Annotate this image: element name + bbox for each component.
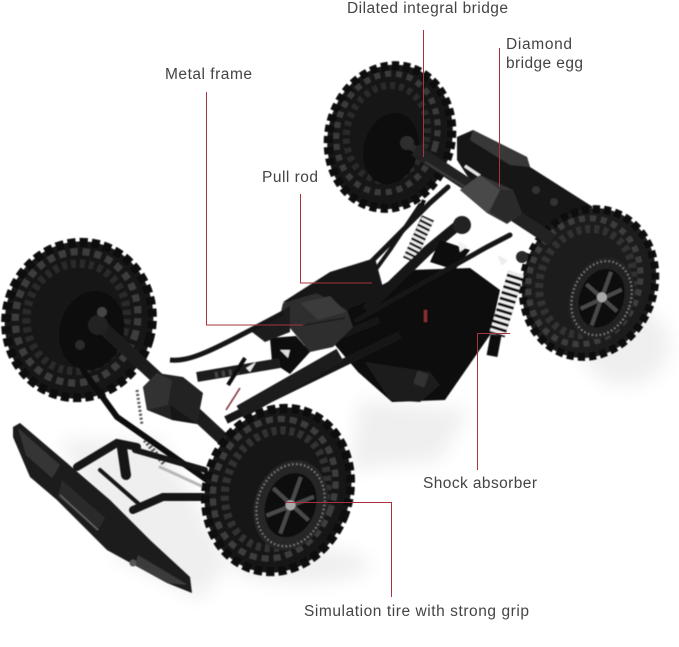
label: shock absorber: Shock absorber xyxy=(423,475,537,492)
label: dilated integral bridge: Dilated integral bridge xyxy=(347,0,508,17)
front spring xyxy=(137,390,165,465)
front differential cover xyxy=(143,373,203,424)
leader line: metal frame xyxy=(206,92,303,325)
label: diamond bridge egg: Diamond xyxy=(506,36,572,53)
leader line: dilated integral bridge xyxy=(422,30,424,157)
rear left tire xyxy=(311,50,469,224)
rear axle hub xyxy=(400,136,430,160)
front axle xyxy=(75,307,224,440)
ground shadow xyxy=(60,305,670,600)
front right tire xyxy=(182,386,374,594)
front left tire xyxy=(0,225,171,415)
center driveshaft xyxy=(366,216,508,310)
frame rails xyxy=(226,258,400,420)
rear skid plate xyxy=(457,130,593,238)
bumper brackets xyxy=(77,443,210,510)
rear axle housing xyxy=(415,150,552,240)
leader line: diamond bridge egg xyxy=(498,48,500,187)
front bumper xyxy=(13,423,192,593)
diamond differential xyxy=(460,175,522,224)
front lower link xyxy=(83,370,207,480)
label: diamond bridge egg: bridge egg xyxy=(506,55,583,72)
battery tray and central body xyxy=(335,268,500,402)
label: diamond bridge egg xyxy=(506,36,583,72)
leader line: shock absorber xyxy=(478,334,510,470)
front driveshaft xyxy=(170,313,283,410)
label: simulation tire with strong grip: Simulation tire with strong grip xyxy=(304,603,529,620)
leader line: simulation tire xyxy=(285,502,392,597)
right rear tire xyxy=(501,189,677,377)
leader line: pull rod xyxy=(300,194,372,283)
metal frame plate xyxy=(252,293,353,374)
rear right shock xyxy=(492,251,528,356)
label: metal frame: Metal frame xyxy=(165,66,252,83)
rear left shock xyxy=(409,200,428,260)
label: pull rod: Pull rod xyxy=(262,169,318,186)
pull rods xyxy=(340,187,510,320)
